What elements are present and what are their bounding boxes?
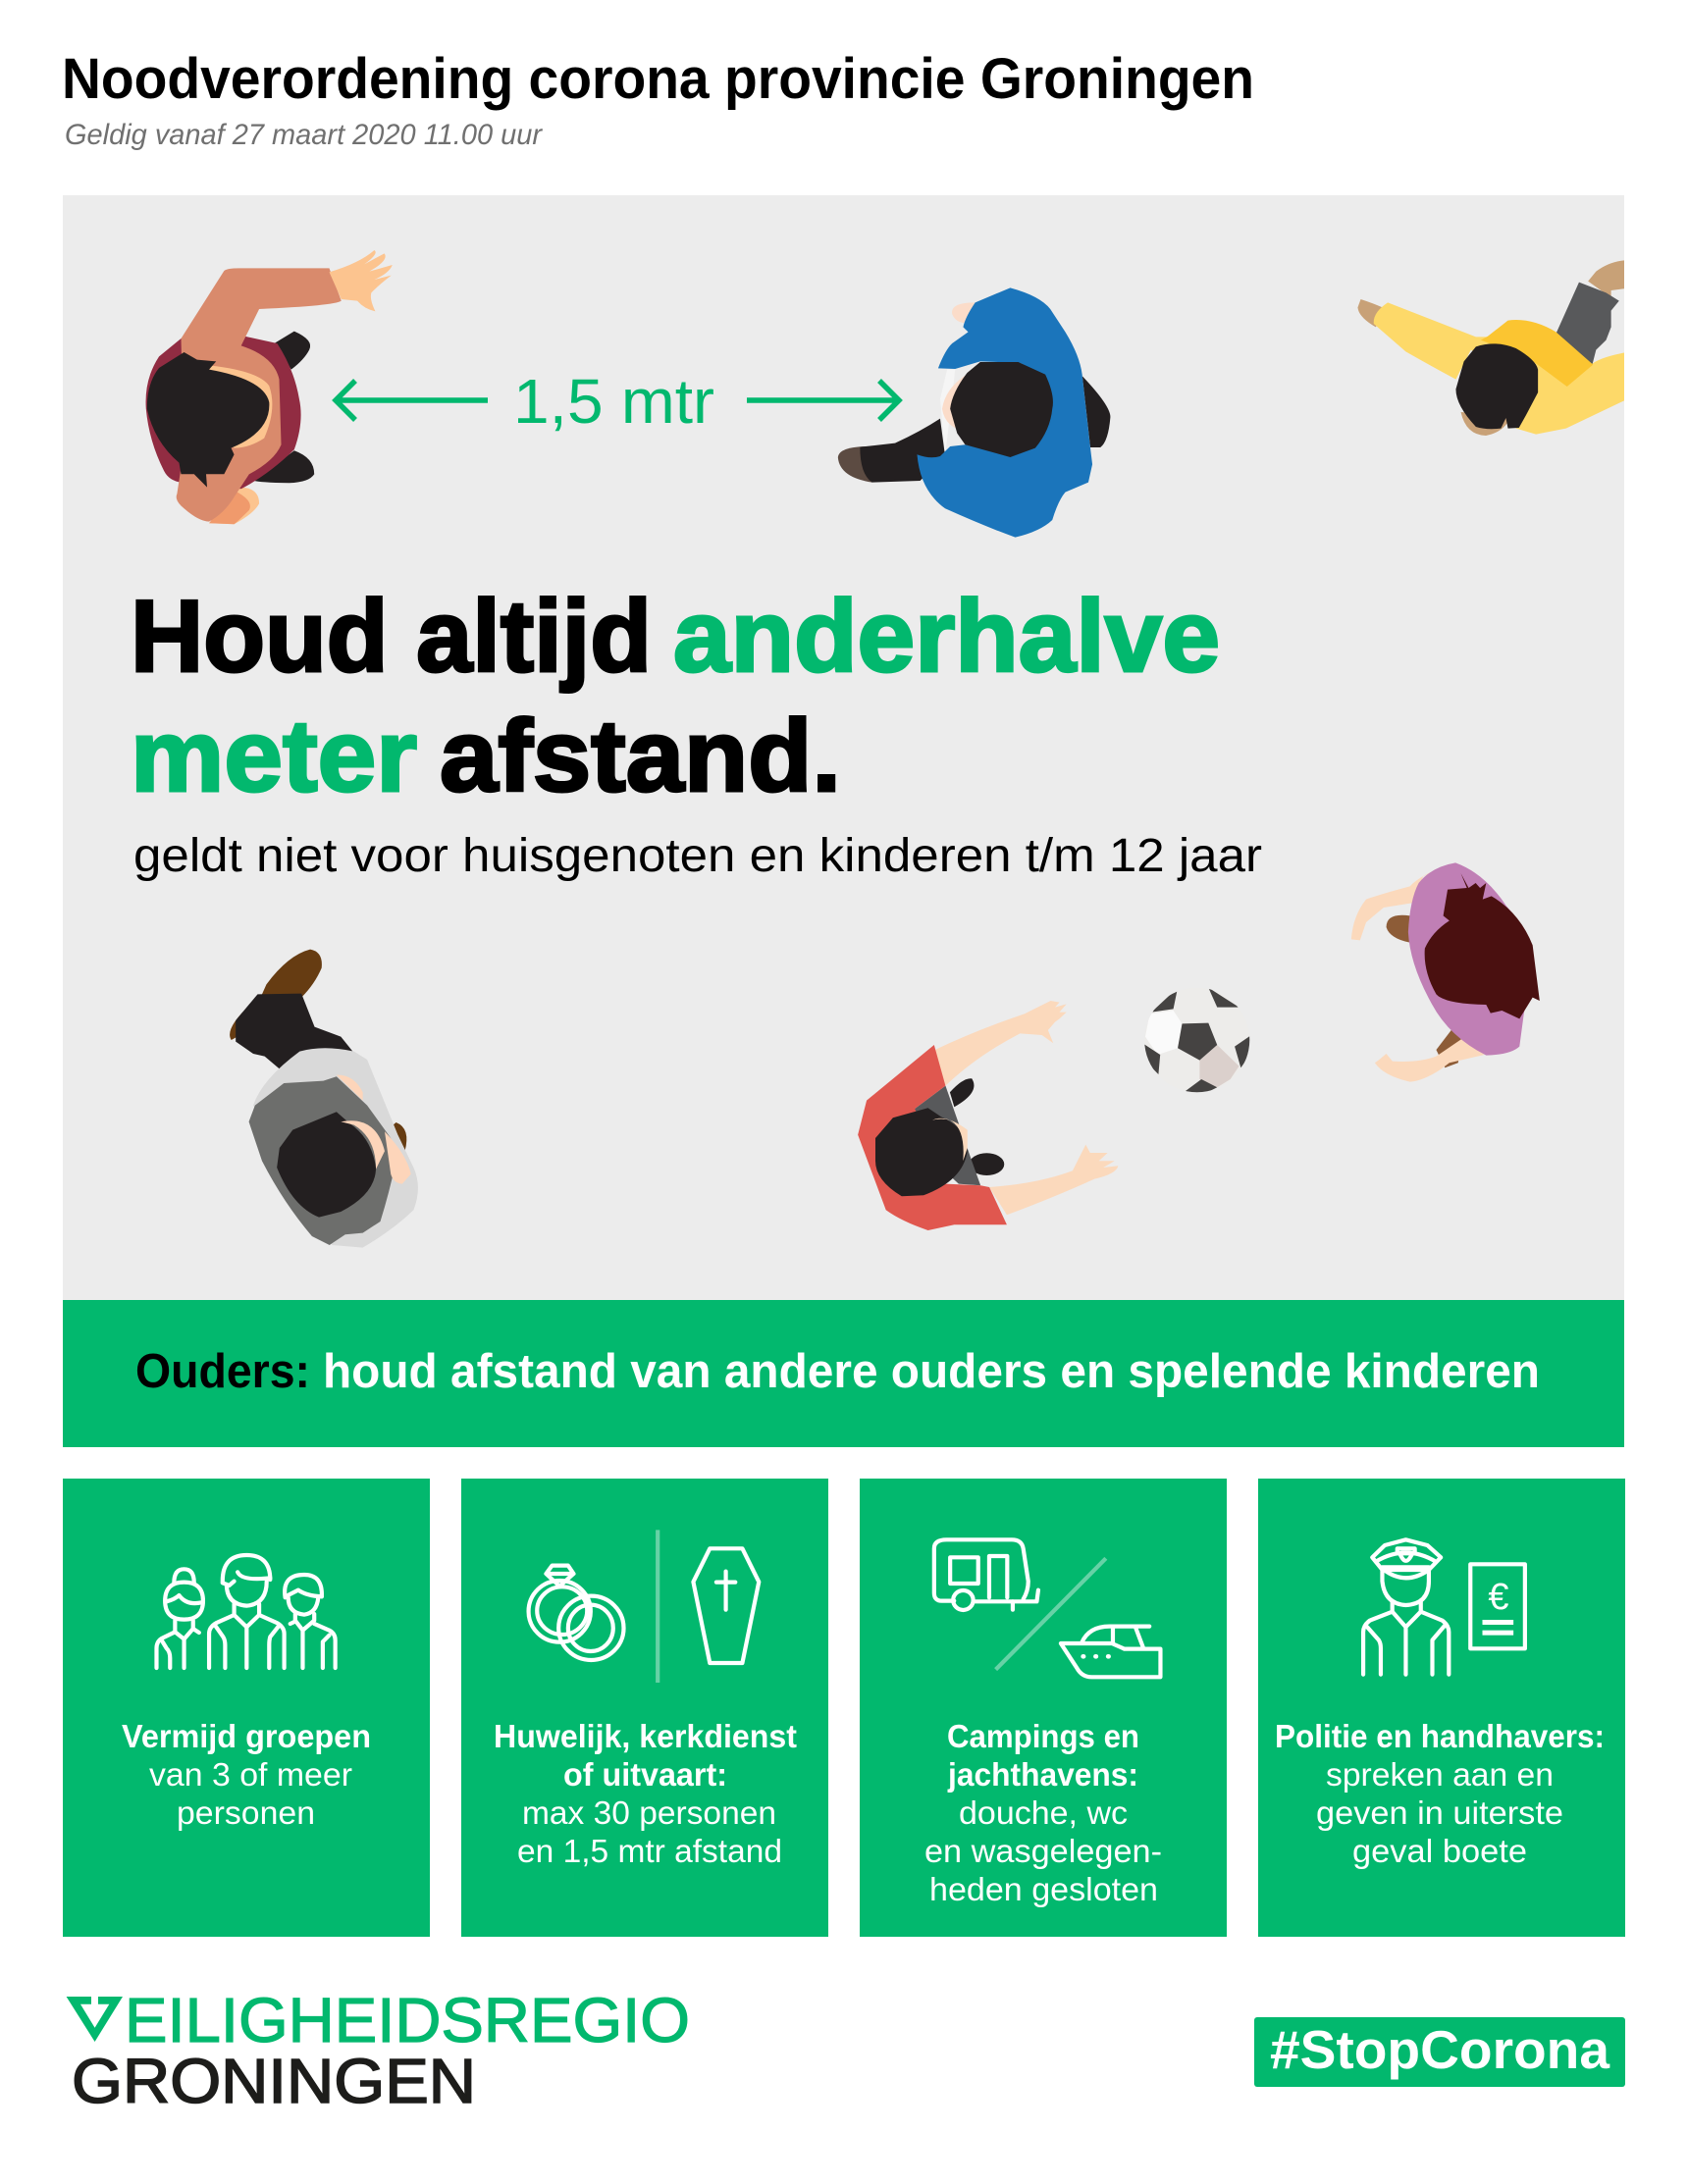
subtitle: Geldig vanaf 27 maart 2020 11.00 uur [65, 119, 543, 151]
arrow: right [747, 381, 900, 420]
heading: Houd altijd: Houd altijd [131, 580, 652, 694]
card text: van 3 of meer [149, 1756, 352, 1793]
icon: group of people [156, 1555, 336, 1668]
card text: spreken aan en [1326, 1756, 1554, 1793]
card text: Huwelijk, kerkdienst [494, 1718, 797, 1754]
icon: wedding rings, divider and coffin [529, 1530, 759, 1683]
figure: person in blue coat [838, 287, 1110, 538]
card text: douche, wc [959, 1794, 1128, 1831]
figure: person in purple shirt [1351, 862, 1540, 1082]
card text: jachthavens: [947, 1756, 1138, 1793]
panel: campings en jachthavens [860, 1479, 1227, 1937]
panel background [63, 195, 1624, 1300]
card text: geven in uiterste [1316, 1794, 1563, 1831]
icon: police officer with fine: € [1488, 1577, 1509, 1618]
figure: person in yellow shirt [1357, 260, 1631, 436]
card text: heden gesloten [929, 1871, 1158, 1907]
sub heading: geldt niet voor huisgenoten en kinderen t/m 12 jaar [133, 830, 1262, 882]
logo text: veiligheidsregio: EILIGHEIDSREGIO [125, 1985, 690, 2055]
panel: vermijd groepen [63, 1479, 430, 1937]
main heading [131, 580, 1220, 813]
figure: person in maroon shirt [146, 250, 393, 524]
panel: politie en handhavers [1258, 1479, 1625, 1937]
hashtag badge [1254, 2017, 1625, 2087]
card text [1275, 1718, 1605, 1869]
card text: Campings en [947, 1718, 1139, 1754]
arrow: left [336, 381, 488, 420]
card text: max 30 personen [522, 1794, 776, 1831]
badge text: #StopCorona [1270, 2019, 1609, 2080]
icon: football [1142, 988, 1251, 1094]
card background [63, 1479, 430, 1937]
logo: veiligheidsregio groningen [67, 1985, 690, 2116]
card text: en 1,5 mtr afstand [517, 1833, 782, 1869]
card text: of uitvaart: [563, 1756, 727, 1793]
card background [1258, 1479, 1625, 1937]
card text [924, 1718, 1162, 1907]
card background [461, 1479, 828, 1937]
logo mark [67, 1997, 123, 2042]
heading: anderhalve: anderhalve [673, 580, 1220, 694]
banner: ouders [63, 1300, 1624, 1447]
banner label: Ouders: [135, 1345, 310, 1398]
card text: geval boete [1352, 1833, 1527, 1869]
heading: afstand.: afstand. [440, 700, 841, 813]
card text: Vermijd groepen [122, 1718, 371, 1754]
heading: meter: meter [131, 700, 417, 813]
card background [860, 1479, 1227, 1937]
card text [494, 1718, 797, 1869]
card text: en wasgelegen- [924, 1833, 1162, 1869]
icon: caravan, divider and boat [934, 1539, 1160, 1677]
card text [122, 1718, 371, 1831]
distance label: 1,5 mtr [513, 366, 714, 437]
panel: distance illustration [63, 195, 1631, 1300]
card text: personen [177, 1794, 315, 1831]
logo text: groningen: GRONINGEN [72, 2046, 476, 2116]
banner background [63, 1300, 1624, 1447]
card text: Politie en handhavers: [1275, 1718, 1605, 1754]
figure: person in grey coat [230, 950, 418, 1248]
badge background [1254, 2017, 1625, 2087]
panel: huwelijk en uitvaart [461, 1479, 828, 1937]
figure: child in red shirt [858, 1001, 1118, 1230]
icon: police officer with fine [1363, 1539, 1525, 1675]
title: Noodverordening corona provincie Groningen [62, 47, 1254, 111]
banner message: houd afstand van andere ouders en spelende kinderen [323, 1345, 1540, 1398]
